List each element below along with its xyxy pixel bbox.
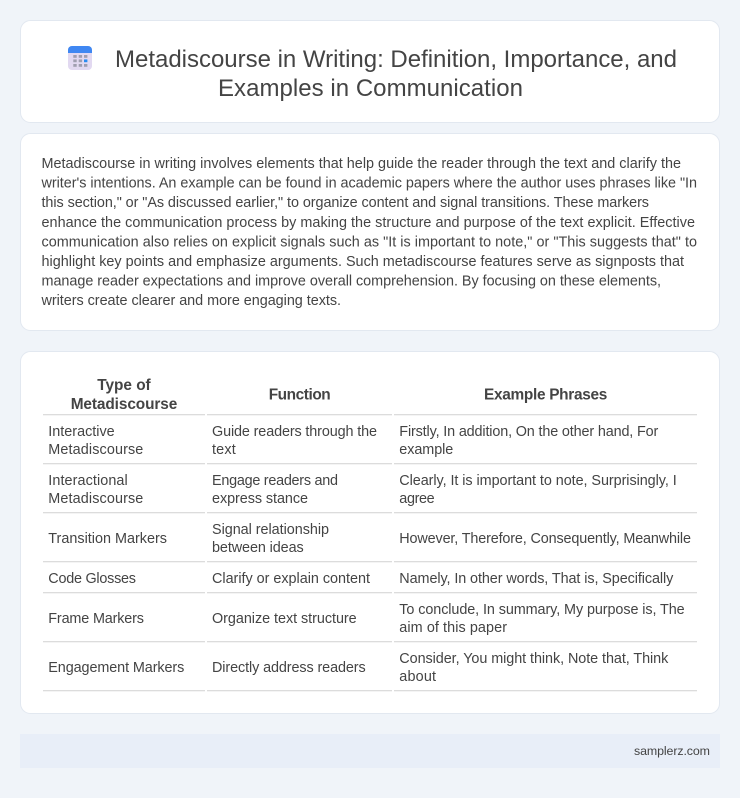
table row: interactive metadiscourse: Metadiscourse: [48, 442, 143, 458]
table header: Type of: [97, 377, 152, 394]
table row: engagement markers: about: [399, 669, 436, 685]
table row: interactive metadiscourse: Guide readers through the: [212, 424, 377, 440]
table row: interactional metadiscourse: [48, 473, 677, 507]
text block: description paragraph: enhance the communication process by making the structure and purpose of the text explicit. Effective: [42, 215, 695, 231]
panel: introduction: [20, 134, 720, 330]
table row: frame markers: To conclude, In summary, My purpose is, The: [399, 602, 685, 618]
text block: description paragraph: communication also relies on explicit signals such as "It is important to note," or "This suggests that" to: [42, 234, 697, 250]
table row: code glosses: Namely, In other words, That is, Specifically: [399, 571, 674, 587]
table header: Function: [269, 386, 331, 403]
table row: interactional metadiscourse: Interactional: [48, 473, 128, 489]
table row: engagement markers: Engagement Markers: [48, 660, 184, 676]
table row: interactional metadiscourse: Metadiscourse: [48, 491, 143, 507]
text block: description paragraph: writer's intentions. An example can be found in academic papers where the author uses phrases like "In: [40, 176, 697, 192]
table row: interactional metadiscourse: agree: [399, 491, 435, 507]
table row: transition markers: Transition Markers: [48, 531, 167, 547]
footer: [20, 734, 720, 768]
text block: description paragraph: this section," or "As discussed earlier," to organize content and signal transitions. These markers: [42, 195, 649, 211]
title: Metadiscourse in Writing: Definition, Importance, and: [115, 46, 677, 73]
table row: frame markers: [48, 602, 685, 636]
table row: engagement markers: Directly address readers: [212, 660, 366, 676]
table row: engagement markers: Consider, You might think, Note that, Think: [399, 651, 669, 667]
title: Examples in Communication: [218, 75, 523, 102]
table row: engagement markers: [48, 651, 669, 685]
table row: interactional metadiscourse: express stance: [212, 491, 308, 507]
text block: description paragraph: Metadiscourse in writing involves elements that help guide the reader through the text and clarify the: [42, 156, 681, 172]
table row: transition markers: However, Therefore, Consequently, Meanwhile: [399, 531, 691, 547]
table row: code glosses: [48, 571, 674, 587]
text block: description paragraph: highlight key points and emphasize arguments. Such metadiscourse features serve as signposts that: [42, 254, 684, 270]
table row: interactive metadiscourse: Firstly, In addition, On the other hand, For: [399, 424, 659, 440]
table row: interactive metadiscourse: [48, 424, 659, 458]
table row: frame markers: Frame Markers: [48, 611, 144, 627]
table row: code glosses: Clarify or explain content: [212, 571, 370, 587]
table header: [71, 377, 607, 413]
text block: description paragraph: manage reader expectations and improve overall comprehension. By focusing on these elements,: [42, 274, 661, 290]
table header: Example Phrases: [484, 386, 607, 403]
table row: interactive metadiscourse: Interactive: [48, 424, 115, 440]
table row: code glosses: Code Glosses: [48, 571, 136, 587]
panel: title header: [20, 20, 720, 122]
table row: frame markers: Organize text structure: [212, 611, 357, 627]
table row: frame markers: aim of this paper: [399, 620, 507, 636]
table row: interactional metadiscourse: Clearly, It is important to note, Surprisingly, I: [399, 473, 677, 489]
table row: transition markers: between ideas: [212, 540, 304, 556]
panel: metadiscourse table: [20, 352, 720, 714]
table row: interactive metadiscourse: example: [399, 442, 453, 458]
text block: description paragraph: writers create clearer and more engaging texts.: [40, 293, 341, 309]
table row: transition markers: [48, 522, 691, 556]
table header: Metadiscourse: [71, 396, 178, 413]
footer: samplerz.com: [634, 744, 710, 758]
table row: interactive metadiscourse: text: [212, 442, 236, 458]
icon: calendar grid: [68, 46, 92, 70]
table row: interactional metadiscourse: Engage readers and: [212, 473, 338, 489]
title: [115, 46, 677, 102]
table row: transition markers: Signal relationship: [212, 522, 329, 538]
text block: description paragraph: [40, 156, 697, 309]
